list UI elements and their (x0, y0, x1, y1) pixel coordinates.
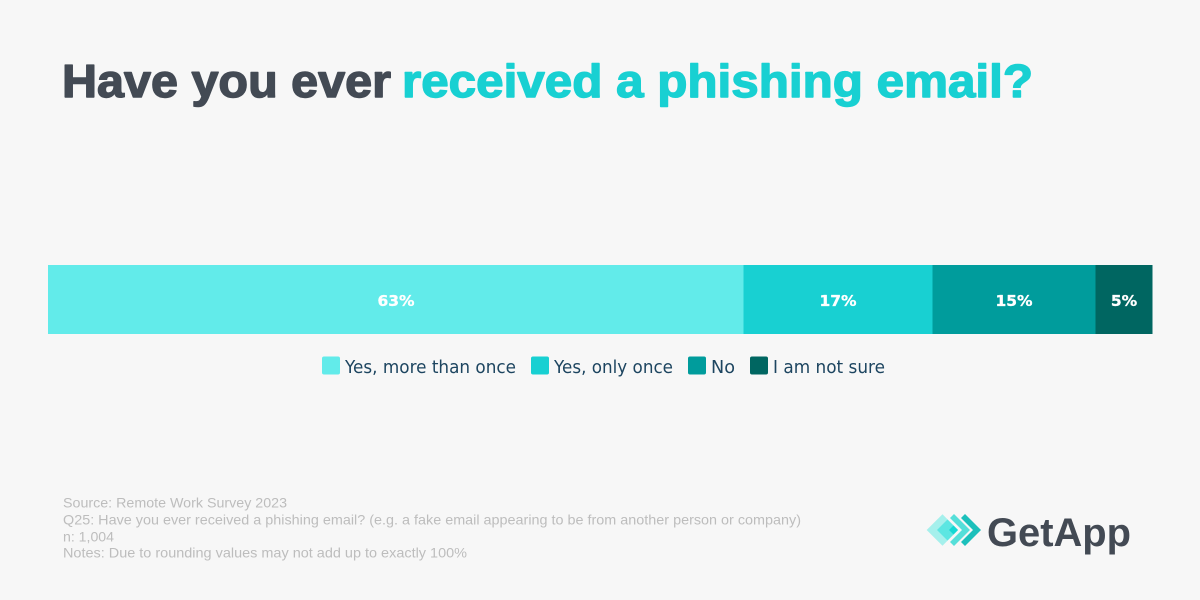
source notes: n: 1,004 (63, 528, 114, 544)
segment: no 15% (932, 265, 1096, 334)
title (62, 55, 1033, 107)
segment: not sure 5%: 5% (1111, 292, 1138, 310)
source notes: Q25: Have you ever received a phishing email? (e.g. a fake email appearing to be from another person or company) (63, 512, 801, 528)
segment: yes, more than once 63% (48, 265, 744, 334)
legend item: no (688, 356, 735, 378)
source notes (63, 494, 801, 560)
legend item: yes, more than once: Yes, more than once (344, 358, 516, 378)
legend item: not sure: I am not sure (773, 358, 885, 378)
segment: yes, only once 17%: 17% (819, 292, 857, 310)
segment: yes, only once 17% (744, 265, 932, 334)
segment: yes, more than once 63%: 63% (377, 292, 415, 310)
source notes: Source: Remote Work Survey 2023 (63, 494, 287, 510)
legend (322, 356, 885, 378)
GetApp logo (927, 511, 1131, 555)
stacked bar chart (48, 265, 1152, 334)
title: Have you ever (62, 55, 391, 107)
legend item: no: No (711, 358, 735, 378)
icon: diamond and chevrons (927, 514, 981, 546)
legend item: yes, only once: Yes, only once (553, 358, 673, 378)
title: received a phishing email? (402, 55, 1033, 107)
logo wordmark: GetApp (987, 511, 1131, 555)
segment: not sure 5% (1096, 265, 1152, 334)
segment: no 15%: 15% (995, 292, 1033, 310)
source notes: Notes: Due to rounding values may not add up to exactly 100% (63, 544, 467, 560)
